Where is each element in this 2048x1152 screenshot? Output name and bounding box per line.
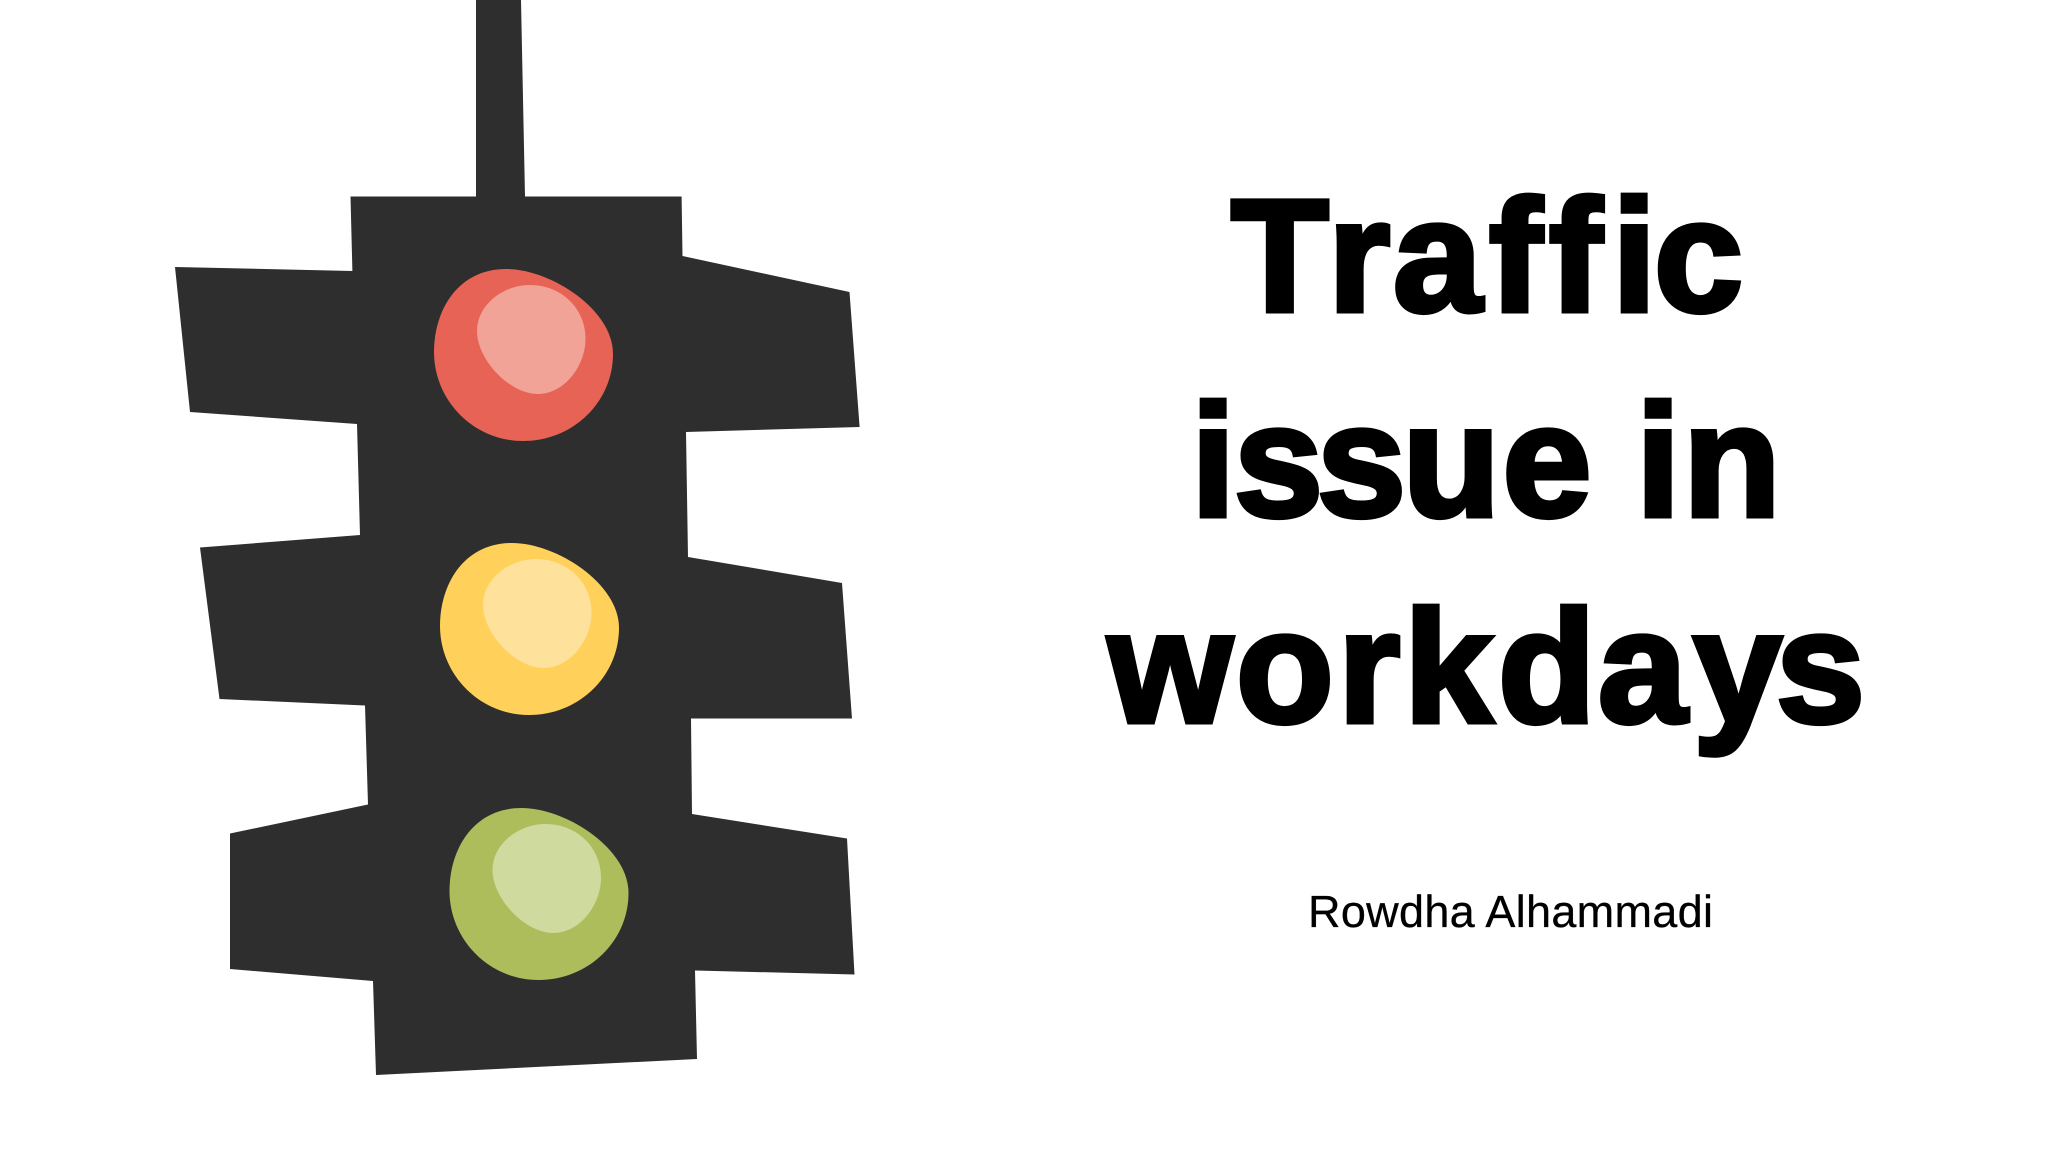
red light (434, 269, 613, 441)
traffic light body and pole (175, 0, 860, 1075)
yellow light (440, 543, 619, 715)
title: workdays (1107, 577, 1865, 756)
icon: traffic light (175, 0, 860, 1075)
author name: Rowdha Alhammadi (1308, 886, 1713, 937)
title: issue in (1191, 371, 1781, 550)
title (1107, 166, 1865, 756)
green light (450, 808, 628, 980)
title: Traffic (1231, 166, 1743, 345)
